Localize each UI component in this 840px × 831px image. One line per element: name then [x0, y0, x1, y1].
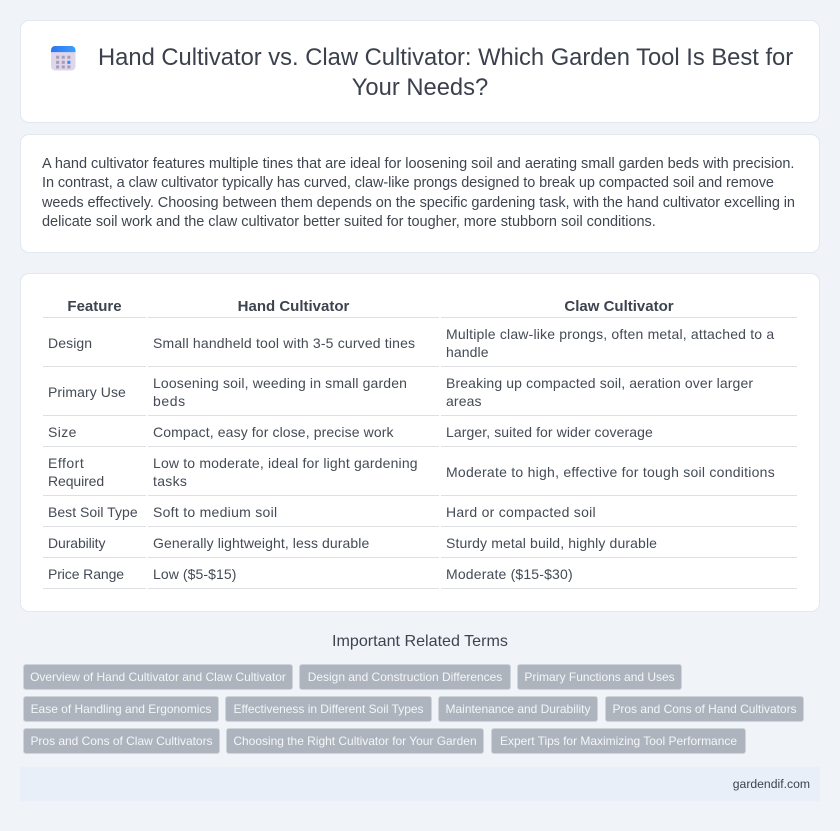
row: durability: [48, 535, 657, 551]
row: primary use: Primary Use: [48, 384, 126, 400]
title: [98, 44, 793, 101]
row: best soil type: Best Soil Type: [48, 504, 138, 520]
table header: Claw Cultivator: [564, 298, 674, 315]
tag: [605, 696, 804, 722]
table header: Feature: [67, 298, 122, 315]
row: design: handle: [446, 344, 489, 360]
row: size: Size: [48, 424, 77, 440]
tag: Expert Tips for Maximizing Tool Performance: [500, 734, 737, 748]
row: primary use: beds: [153, 393, 186, 409]
tag: Pros and Cons of Claw Cultivators: [30, 734, 213, 748]
tag: [23, 728, 220, 754]
row: best soil type: [48, 504, 596, 520]
row: effort required: Effort: [48, 455, 84, 471]
title: Hand Cultivator vs. Claw Cultivator: Which Garden Tool Is Best for: [98, 44, 793, 71]
row: price range: [48, 566, 573, 582]
row: best soil type: Soft to medium soil: [153, 504, 277, 520]
table header: Hand Cultivator: [238, 298, 349, 315]
row: primary use: areas: [446, 393, 482, 409]
table header: [67, 298, 674, 315]
row: effort required: tasks: [153, 473, 187, 489]
tag: [438, 696, 598, 722]
row: effort required: Required: [48, 473, 104, 489]
related terms tags: [23, 664, 804, 754]
tag: Primary Functions and Uses: [524, 670, 675, 684]
tag: [23, 696, 219, 722]
intro text: A hand cultivator features multiple tines that are ideal for loosening soil and aerating small garden beds with precision.: [42, 156, 794, 172]
row: primary use: Breaking up compacted soil, aeration over larger: [446, 375, 753, 391]
row: durability: Sturdy metal build, highly durable: [446, 535, 657, 551]
comparison table: [43, 298, 797, 589]
intro text: [42, 156, 795, 230]
row: primary use: Loosening soil, weeding in small garden: [153, 375, 407, 391]
row: effort required: Low to moderate, ideal for light gardening: [153, 455, 418, 471]
intro card: [20, 134, 820, 253]
row: size: Larger, suited for wider coverage: [446, 424, 653, 440]
table card: [20, 273, 820, 612]
row: price range: Low ($5-$15): [153, 566, 236, 582]
intro text: delicate soil work and the claw cultivator better suited for tougher, more stubborn soil conditions.: [42, 214, 656, 230]
row: primary use: [48, 375, 753, 409]
row: design: Design: [48, 335, 92, 351]
tag: Effectiveness in Different Soil Types: [233, 702, 424, 716]
tag: [23, 664, 293, 690]
tag: [299, 664, 511, 690]
row: price range: Price Range: [48, 566, 124, 582]
row: effort required: [48, 455, 775, 489]
icon: calendar: [51, 46, 76, 70]
row: size: [48, 424, 653, 440]
related terms heading: Important Related Terms: [332, 632, 508, 650]
row: price range: Moderate ($15-$30): [446, 566, 573, 582]
row: best soil type: Hard or compacted soil: [446, 504, 596, 520]
row: design: [48, 326, 774, 360]
tag: [517, 664, 682, 690]
row: size: Compact, easy for close, precise work: [153, 424, 394, 440]
header card: [20, 20, 820, 123]
intro text: weeds effectively. Choosing between them depends on the specific gardening task, with the hand cultivator excelling in: [42, 195, 795, 211]
tag: Ease of Handling and Ergonomics: [31, 702, 211, 716]
row: design: Multiple claw-like prongs, often metal, attached to a: [446, 326, 774, 342]
tag: Design and Construction Differences: [308, 670, 502, 684]
tag: [491, 728, 746, 754]
tag: [226, 728, 484, 754]
tag: Overview of Hand Cultivator and Claw Cultivator: [30, 670, 286, 684]
tag: Choosing the Right Cultivator for Your Garden: [233, 734, 477, 748]
tag: Pros and Cons of Hand Cultivators: [612, 702, 797, 716]
footer bar: [20, 767, 820, 801]
title: Your Needs?: [352, 74, 488, 101]
intro text: In contrast, a claw cultivator typically has curved, claw-like prongs designed to break up compacted soil and remove: [42, 175, 774, 191]
footer text: gardendif.com: [733, 777, 810, 791]
tag: [225, 696, 432, 722]
tag: Maintenance and Durability: [446, 702, 590, 716]
row: effort required: Moderate to high, effective for tough soil conditions: [446, 464, 775, 480]
row: durability: Durability: [48, 535, 105, 551]
row: design: Small handheld tool with 3-5 curved tines: [153, 335, 415, 351]
row: durability: Generally lightweight, less durable: [153, 535, 369, 551]
